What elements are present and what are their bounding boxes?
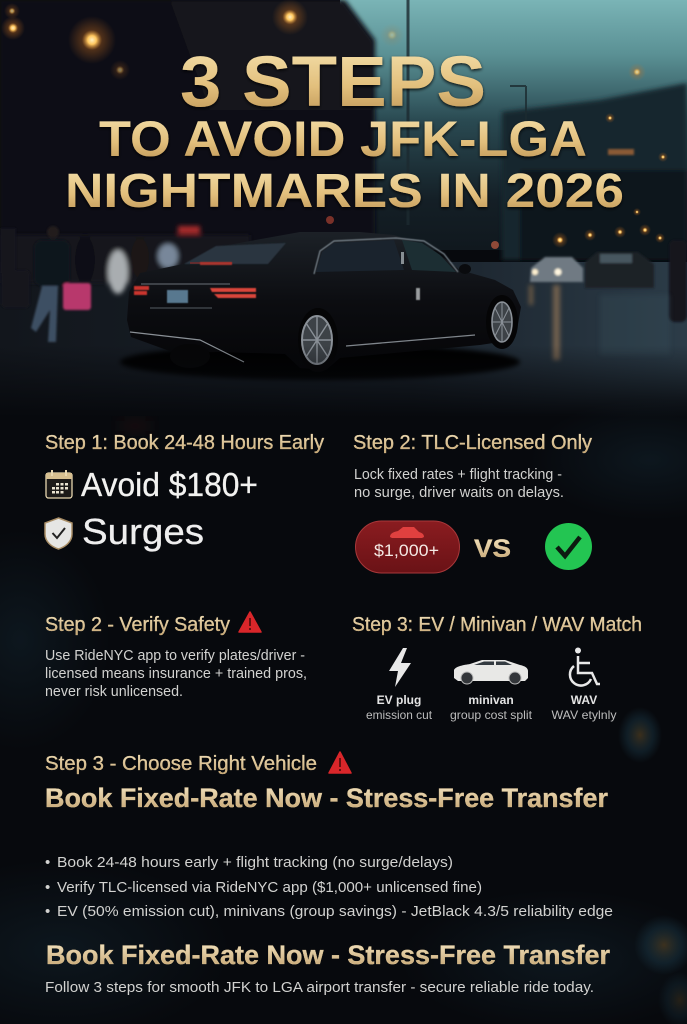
text: avoid surcharge: Avoid $180+ — [81, 466, 258, 503]
icon: green check — [545, 523, 592, 570]
label: EV plug: EV plug — [377, 693, 421, 707]
text: fixed rates: Lock fixed rates + flight tracking - — [354, 466, 562, 483]
list: summary bullets: • — [45, 903, 50, 920]
icon: lightning bolt — [389, 648, 411, 687]
trunk line — [141, 283, 230, 285]
chrome strips — [130, 332, 244, 362]
rear window — [184, 243, 286, 264]
photo: rainy street scene — [0, 0, 687, 425]
text: verify description: Use RideNYC app to verify plates/driver - — [45, 648, 305, 664]
background: ambient glows and lens flares — [0, 400, 687, 1024]
heading: choose right vehicle: Step 3 - Choose Right Vehicle — [45, 752, 317, 775]
label: WAV: WAV etylnly — [552, 708, 616, 722]
title — [65, 43, 624, 218]
label: WAV — [552, 693, 616, 722]
heading: step 2: Step 2: TLC-Licensed Only — [353, 431, 593, 454]
licence plate — [167, 290, 188, 303]
list: summary bullets: • — [45, 854, 50, 871]
far-right pedestrian — [669, 240, 687, 322]
side windows — [316, 240, 404, 272]
heading: step 1: Step 1: Book 24-48 Hours Early — [45, 431, 325, 454]
label: WAV: WAV — [571, 693, 597, 707]
icon: warning triangle — [329, 752, 351, 773]
text: versus: VS — [474, 535, 511, 563]
wheels — [170, 344, 210, 368]
label: minivan — [450, 693, 533, 722]
sky — [340, 0, 687, 250]
heading: call to action lower: Book Fixed-Rate Now - Stress-Free Transfer — [46, 940, 610, 970]
fade to dark — [0, 345, 687, 425]
list: summary bullets: Verify TLC-licensed via RideNYC app ($1,000+ unlicensed fine) — [57, 879, 482, 896]
list: summary bullets: EV (50% emission cut), minivans (group savings) - JetBlack 4.3/5 reliability edge — [57, 903, 613, 920]
title: NIGHTMARES IN 2026 — [65, 165, 624, 218]
panel: step 3 vehicle match — [352, 613, 642, 722]
list: summary bullets — [45, 854, 613, 920]
heading: vehicle match: Step 3: EV / Minivan / WAV Match — [352, 613, 642, 636]
left buildings — [0, 0, 375, 250]
text: verify description — [45, 648, 307, 700]
road — [0, 262, 687, 417]
label: minivan: minivan — [468, 693, 514, 707]
text: verify description: never risk unlicensed. — [45, 684, 183, 700]
heading: call to action upper: Book Fixed-Rate Now - Stress-Free Transfer — [45, 783, 608, 813]
limousine — [120, 232, 521, 380]
icon: white car — [454, 660, 528, 684]
label: minivan: group cost split — [450, 708, 533, 722]
lamp posts — [408, 0, 526, 225]
mirror — [459, 264, 471, 274]
body highlights — [416, 288, 420, 300]
badge: fine — [356, 521, 460, 573]
title: 3 STEPS — [180, 43, 486, 122]
right building — [502, 83, 687, 260]
car body — [127, 232, 521, 370]
pedestrian — [0, 226, 91, 342]
label: EV plug — [366, 693, 433, 722]
crowd — [0, 226, 250, 294]
panel: step 2 verify safety — [45, 612, 307, 700]
street lights — [1, 0, 668, 249]
text: fixed rates — [354, 466, 564, 501]
label: EV plug: emission cut — [366, 708, 433, 722]
icon: calendar — [46, 470, 72, 498]
title: TO AVOID JFK-LGA — [99, 111, 587, 167]
badge: fine: $1,000+ — [374, 542, 439, 560]
icon: red car — [390, 527, 424, 538]
panel: step 1 book early — [45, 431, 325, 552]
list: summary bullets: • — [45, 879, 50, 896]
panel: step 2 TLC-licensed — [353, 431, 593, 573]
tail lights — [134, 262, 256, 298]
text: closing line: Follow 3 steps for smooth JFK to LGA airport transfer - secure reliable ride today. — [45, 979, 594, 996]
text: verify description: licensed means insurance + trained pros, — [45, 666, 307, 682]
text: fixed rates: no surge, driver waits on delays. — [354, 484, 564, 501]
background cars — [530, 252, 654, 288]
icon: warning triangle — [239, 612, 261, 632]
text: surges: Surges — [82, 511, 204, 552]
icon: wheelchair — [570, 648, 600, 686]
list: summary bullets: Book 24-48 hours early + flight tracking (no surge/delays) — [57, 854, 453, 871]
car shadow on road — [120, 344, 520, 380]
road reflections — [529, 285, 670, 360]
heading: verify safety: Step 2 - Verify Safety — [45, 613, 231, 636]
icon: shield — [45, 518, 72, 549]
